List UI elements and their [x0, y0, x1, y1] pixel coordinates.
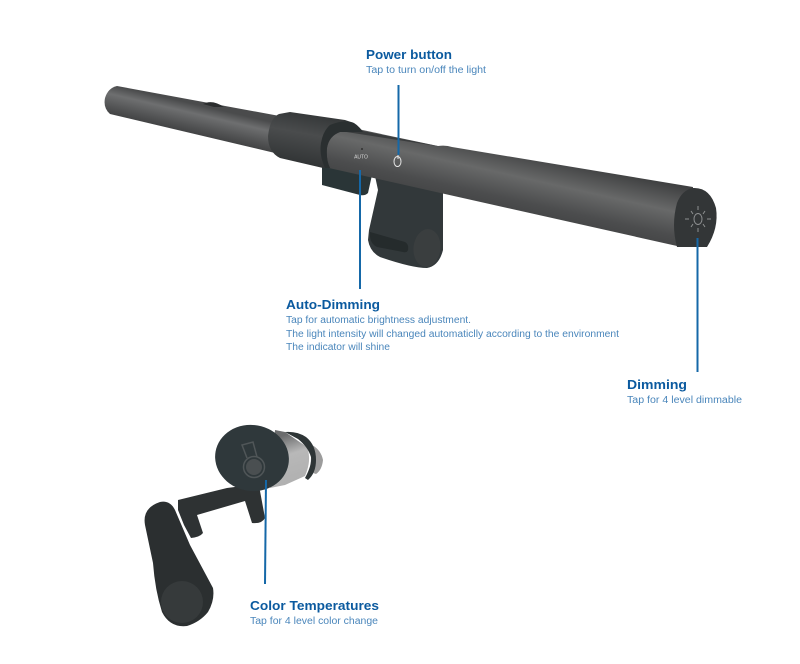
callout: color temperatures: Color Temperatures: [250, 598, 379, 613]
callout: color temperatures: Tap for 4 level color change: [250, 616, 378, 627]
icon: thermometer: [242, 442, 264, 478]
end cap: [674, 188, 717, 247]
label: AUTO: AUTO: [354, 154, 368, 160]
icon: brightness sun: [685, 206, 711, 232]
main light bar: [105, 86, 717, 268]
side view lamp: [145, 419, 323, 626]
callout: auto-dimming: [286, 297, 619, 353]
callout: color temperatures: [250, 598, 379, 627]
callout: power button: [366, 47, 486, 76]
dark upper band on bar: [340, 131, 440, 146]
callout: auto-dimming: Auto-Dimming: [286, 297, 380, 312]
far end tip: [310, 445, 323, 474]
hook clamp behind bar: [368, 176, 443, 268]
lever knob: [161, 581, 203, 623]
slot on bar: [203, 102, 224, 107]
callout: auto-dimming: The light intensity will changed automaticlly according to the environment: [286, 329, 619, 340]
callout: power button: Power button: [366, 47, 452, 62]
callout: dimming: Tap for 4 level dimmable: [627, 395, 742, 406]
bar left section: [105, 86, 285, 153]
cylinder body: [270, 430, 309, 488]
icon: power: [394, 155, 401, 166]
callout: dimming: Dimming: [627, 377, 687, 392]
disc: [210, 419, 294, 497]
lever: [145, 502, 213, 626]
sleeve ring: [320, 121, 363, 168]
bar right section: [320, 122, 693, 246]
callout: dimming: [627, 377, 742, 406]
clamp sleeve: [268, 112, 363, 168]
callout: auto-dimming: The indicator will shine: [286, 342, 390, 353]
far end dark ring: [285, 432, 316, 480]
lower clamp block: [322, 165, 372, 195]
arm: [178, 484, 265, 538]
callout: power button: Tap to turn on/off the light: [366, 65, 486, 76]
indicator dot: [361, 148, 363, 150]
leader lines: [265, 85, 698, 584]
callout: auto-dimming: Tap for automatic brightness adjustment.: [286, 315, 471, 326]
